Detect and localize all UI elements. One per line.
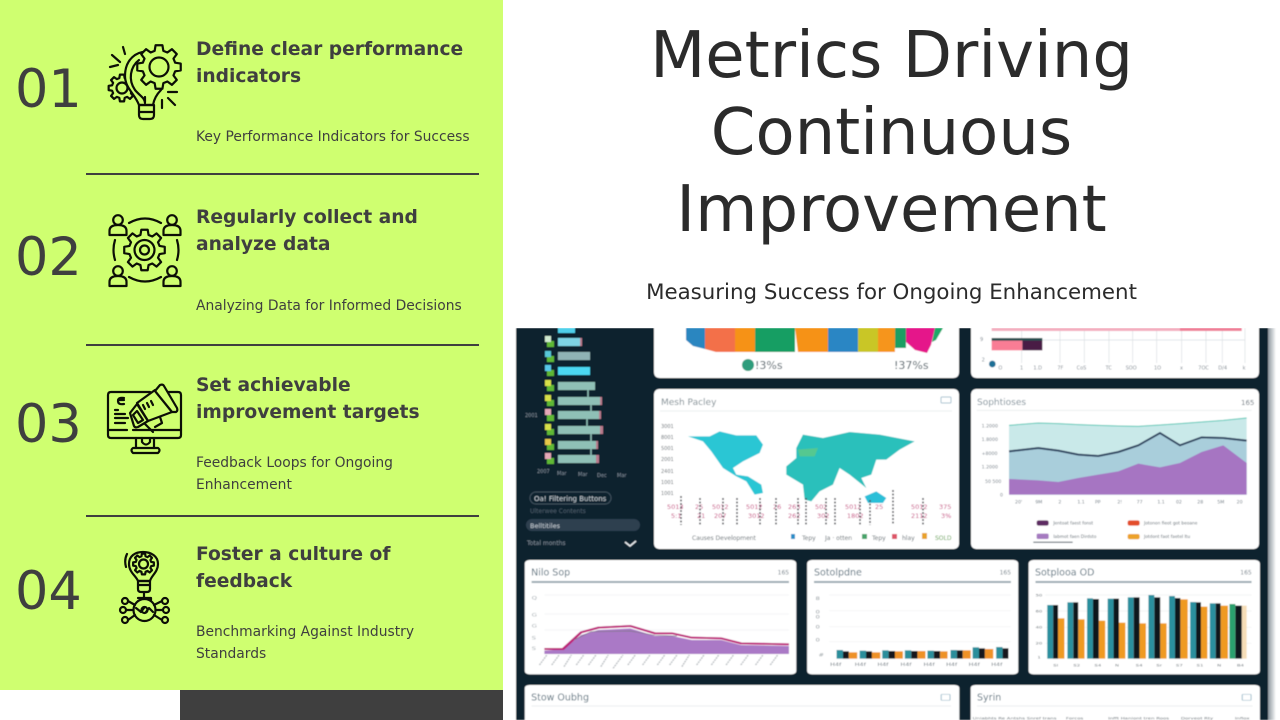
card: bottom-right table panel: Syrin bbox=[977, 692, 1001, 703]
card: large grouped bars: 20 bbox=[1035, 641, 1042, 646]
chart legend bbox=[1033, 520, 1198, 542]
card: small grouped bars: 0 bbox=[815, 638, 820, 643]
chart legend: labmot faen Dirdsto bbox=[1053, 534, 1097, 540]
heading 01 bbox=[196, 39, 463, 87]
card: top-right chart: 7F bbox=[1057, 366, 1063, 372]
card: small grouped bars bbox=[807, 560, 1018, 674]
card: stacked area chart: 165 bbox=[1241, 399, 1254, 407]
map: data labels: 5013 bbox=[667, 503, 684, 511]
card: large grouped bars: S7 bbox=[1176, 663, 1183, 668]
heading 02: Regularly collect and bbox=[196, 207, 418, 228]
step 01 bbox=[15, 39, 470, 145]
icon: bulb with network nodes bbox=[120, 552, 169, 623]
card: regional map strip: !37%s bbox=[894, 359, 929, 372]
card: large grouped bars bbox=[1029, 560, 1260, 674]
map: legend bbox=[692, 533, 952, 542]
card: regional map strip bbox=[654, 328, 959, 378]
icon: team around gear bbox=[110, 215, 180, 286]
card: top-right chart: 1.D bbox=[1033, 366, 1042, 372]
card: small grouped bars: H4f bbox=[969, 663, 981, 668]
map: data labels: 3012 bbox=[748, 512, 765, 520]
card: small grouped bars: H4f bbox=[946, 663, 958, 668]
card: large grouped bars: 50 bbox=[1035, 593, 1042, 598]
card: large grouped bars: Sl bbox=[1053, 663, 1058, 668]
card: large grouped bars: Sotplooa OD bbox=[1035, 568, 1094, 579]
map: data labels: 502 bbox=[815, 503, 827, 511]
description 04: Standards bbox=[196, 646, 266, 662]
map: axis labels: 5001 bbox=[661, 446, 674, 452]
card: small grouped bars: 8 bbox=[815, 597, 820, 602]
sidebar bar list: Mar bbox=[617, 473, 627, 479]
card: bottom-left panel: Stow Oubhg bbox=[531, 692, 589, 703]
title: Metrics Driving bbox=[650, 19, 1133, 93]
heading 03: Set achievable bbox=[196, 375, 351, 396]
map: data labels: 302 bbox=[817, 512, 829, 520]
chart legend: Jentoat faest fonst bbox=[1052, 521, 1093, 527]
map: data labels: 375 bbox=[939, 503, 951, 511]
card: top-right chart: D/4 bbox=[1218, 366, 1227, 372]
map: data labels: 1802 bbox=[847, 512, 864, 520]
card: top-right chart: TC bbox=[1105, 366, 1112, 372]
card: stacked area chart: Sophtioses bbox=[977, 398, 1026, 408]
sidebar bar list bbox=[525, 328, 627, 479]
card: area line chart: S bbox=[532, 636, 536, 641]
map: legend: Causes Development bbox=[692, 535, 757, 542]
card: top-right chart: SOO bbox=[1126, 366, 1137, 372]
description 04: Benchmarking Against Industry bbox=[196, 624, 414, 640]
chart legend: Jotonon fieot got beoane bbox=[1143, 521, 1198, 527]
sidebar bar list: 2007 bbox=[537, 469, 550, 475]
card: area line chart: S bbox=[532, 647, 536, 652]
icon: monitor with megaphone bbox=[108, 385, 181, 453]
divider 2 bbox=[86, 344, 479, 346]
number 01: 01 bbox=[15, 59, 82, 120]
map: legend: hlay bbox=[902, 535, 915, 542]
chart axis labels: 2 bbox=[1058, 500, 1061, 506]
heading 04: Foster a culture of bbox=[196, 544, 390, 565]
map: axis labels: 2001 bbox=[661, 457, 674, 463]
card: large grouped bars: Sr bbox=[1156, 663, 1162, 668]
chart axis labels: 0 bbox=[1000, 492, 1003, 498]
card: small grouped bars: H4f bbox=[991, 663, 1004, 668]
heading 02: analyze data bbox=[196, 234, 330, 255]
map: data labels: 5012 bbox=[746, 503, 763, 511]
heading 04: feedback bbox=[196, 571, 292, 592]
chart axis labels: 1.1 bbox=[1077, 500, 1085, 506]
sidebar bar list: 2001 bbox=[525, 413, 538, 419]
card: small grouped bars: Sotolpdne bbox=[814, 568, 862, 579]
divider 3 bbox=[86, 515, 479, 517]
sidebar filter controls bbox=[526, 492, 640, 547]
map: data labels: 5012 bbox=[712, 503, 729, 511]
chart axis labels: 50 500 bbox=[985, 479, 1001, 485]
panel: lime steps background bbox=[0, 0, 503, 690]
map: axis labels: 2401 bbox=[661, 469, 674, 475]
card: large grouped bars: B4 bbox=[1237, 663, 1244, 668]
dashboard image panel bbox=[515, 328, 1276, 720]
card: area line chart bbox=[525, 560, 796, 674]
chart axis labels: 20' bbox=[1015, 500, 1022, 506]
chart axis labels: 77 bbox=[1137, 500, 1143, 506]
chart axis labels: 02 bbox=[1176, 500, 1182, 506]
number 02: 02 bbox=[15, 227, 82, 288]
map: axis labels: 3001 bbox=[661, 424, 674, 430]
step 03 bbox=[15, 375, 420, 492]
chart axis labels: 20 bbox=[1237, 500, 1243, 506]
card: large grouped bars: S1 bbox=[1197, 663, 1203, 668]
card: large grouped bars: N bbox=[1115, 663, 1119, 668]
card: top-right chart: k bbox=[1243, 366, 1246, 372]
map: data labels: 263 bbox=[788, 503, 800, 511]
chart axis labels: 2! bbox=[1117, 500, 1122, 506]
card: area line chart: 165 bbox=[778, 570, 789, 577]
map: data labels: 5012 bbox=[911, 503, 928, 511]
number 03: 03 bbox=[15, 394, 82, 455]
card: small grouped bars: H4f bbox=[855, 663, 867, 668]
card: bottom-right table panel bbox=[971, 685, 1260, 720]
card: large grouped bars: 40 bbox=[1035, 625, 1042, 630]
map: axis labels bbox=[661, 424, 674, 497]
heading 01: Define clear performance bbox=[196, 39, 463, 60]
chart axis labels: PP bbox=[1095, 500, 1101, 506]
map: data labels: 26 bbox=[773, 503, 781, 511]
card: small grouped bars: 0 bbox=[815, 610, 820, 615]
map: data labels: 5:1 bbox=[671, 512, 681, 520]
title bbox=[650, 19, 1133, 247]
card: top-right chart: O bbox=[998, 366, 1002, 372]
chart axis labels: 9M bbox=[1035, 500, 1042, 506]
description 01: Key Performance Indicators for Success bbox=[196, 129, 470, 145]
card: top-right chart: 1 bbox=[1020, 366, 1023, 372]
number 04: 04 bbox=[15, 561, 82, 622]
description 03: Enhancement bbox=[196, 476, 292, 492]
card: small grouped bars: 165 bbox=[1000, 570, 1011, 577]
map: axis labels: 1001 bbox=[661, 491, 674, 497]
card: world map: Mesh Pacley bbox=[661, 398, 717, 408]
chart axis labels bbox=[982, 423, 1243, 506]
card: large grouped bars: 60 bbox=[1035, 609, 1042, 614]
map: data labels: 25 bbox=[875, 503, 883, 511]
map: legend: Ja · otten bbox=[824, 535, 852, 542]
sidebar filter controls: Total months bbox=[526, 540, 566, 547]
card: area line chart: G bbox=[532, 613, 537, 618]
card: large grouped bars: 165 bbox=[1240, 570, 1252, 577]
card: top-right chart: 1O bbox=[1154, 366, 1161, 372]
map: data labels: 3% bbox=[941, 512, 951, 520]
chart axis labels: 1.1 bbox=[1157, 500, 1165, 506]
card: small grouped bars: H4f bbox=[877, 663, 890, 668]
card: large grouped bars: N bbox=[1217, 663, 1221, 668]
map: data labels: 2112 bbox=[911, 512, 928, 520]
card: top-right chart: 7OC bbox=[1198, 366, 1209, 372]
card: top-right chart: 9 bbox=[980, 337, 983, 343]
map: dark tick columns bbox=[681, 490, 923, 525]
step 04 bbox=[15, 544, 414, 662]
card: small grouped bars: H4f bbox=[830, 663, 843, 668]
card: top-right chart: CoS bbox=[1077, 366, 1086, 372]
dashboard background bbox=[503, 328, 1280, 720]
chart axis labels: 1.2000 bbox=[982, 465, 998, 471]
chart axis labels: 1.2000 bbox=[982, 423, 998, 429]
sidebar filter controls: Oa! Filtering Buttons bbox=[534, 495, 607, 503]
card: area line chart: Nilo Sop bbox=[531, 568, 570, 579]
sidebar bar list: Mar bbox=[557, 471, 567, 477]
heading 01: indicators bbox=[196, 66, 301, 87]
chart axis labels: 5M bbox=[1217, 500, 1224, 506]
card: top-right chart: 2 bbox=[982, 357, 985, 363]
divider 1 bbox=[86, 173, 479, 175]
map: data labels bbox=[667, 503, 951, 520]
card: area line chart: G bbox=[532, 624, 537, 629]
card: small grouped bars: H4f bbox=[900, 663, 913, 668]
card: large grouped bars: S4 bbox=[1094, 663, 1101, 668]
chart axis labels: +8000 bbox=[982, 451, 997, 457]
icon: lightbulb with gears bbox=[109, 45, 181, 119]
map: data labels: 262 bbox=[788, 512, 800, 520]
map: axis labels: 1001 bbox=[661, 480, 674, 486]
step 02 bbox=[15, 207, 462, 314]
card: small grouped bars: 0 bbox=[815, 615, 820, 620]
card: small grouped bars: H4f bbox=[924, 663, 936, 668]
sidebar filter controls: Belltitiles bbox=[530, 522, 561, 530]
card: large grouped bars: S4 bbox=[1136, 663, 1143, 668]
card: bottom-left panel bbox=[525, 685, 959, 720]
title: Improvement bbox=[676, 173, 1107, 247]
map: data labels: 5012 bbox=[845, 503, 862, 511]
card: regional map strip: !3%s bbox=[755, 359, 783, 372]
card: small grouped bars: 0 bbox=[815, 625, 820, 630]
title: Continuous bbox=[711, 96, 1072, 170]
card: top-right chart: x bbox=[1180, 366, 1183, 372]
map: legend: Tepy bbox=[871, 535, 886, 542]
description 03: Feedback Loops for Ongoing bbox=[196, 455, 393, 471]
description 02: Analyzing Data for Informed Decisions bbox=[196, 298, 462, 314]
subtitle: Measuring Success for Ongoing Enhancement bbox=[646, 280, 1137, 305]
map: legend: Tepy bbox=[801, 535, 816, 542]
card: large grouped bars: 1 bbox=[1037, 655, 1041, 660]
card: stacked area chart bbox=[971, 389, 1259, 549]
sidebar filter controls: Ulterwee Contents bbox=[530, 508, 586, 515]
heading 03 bbox=[196, 375, 420, 423]
card: small grouped bars: # bbox=[818, 653, 824, 658]
map: axis labels: 8001 bbox=[661, 435, 674, 441]
card: top-right chart bbox=[971, 328, 1259, 378]
map: legend: SOLD bbox=[935, 535, 952, 542]
map: data labels: 21 bbox=[697, 512, 705, 520]
heading 03: improvement targets bbox=[196, 402, 420, 423]
chart axis labels: 1.8000 bbox=[982, 437, 998, 443]
map: data labels: 207 bbox=[714, 512, 726, 520]
description 04 bbox=[196, 624, 414, 662]
chart areas bbox=[1009, 418, 1247, 495]
heading 04 bbox=[196, 544, 391, 592]
chart legend: Jotdont faot faetel ltu bbox=[1143, 534, 1190, 540]
description 03 bbox=[196, 455, 393, 492]
heading 02 bbox=[196, 207, 418, 255]
card: large grouped bars: S2 bbox=[1073, 663, 1080, 668]
sidebar bar list: Mar bbox=[578, 472, 588, 478]
card: world map bbox=[654, 389, 959, 549]
chart axis labels: 28 bbox=[1197, 500, 1203, 506]
map: data labels: 25 bbox=[695, 503, 703, 511]
footer bar: dark block bbox=[180, 690, 503, 720]
sidebar bar list: Dec bbox=[597, 473, 607, 479]
map: continents bbox=[688, 431, 915, 503]
card: area line chart: Q bbox=[532, 596, 537, 601]
